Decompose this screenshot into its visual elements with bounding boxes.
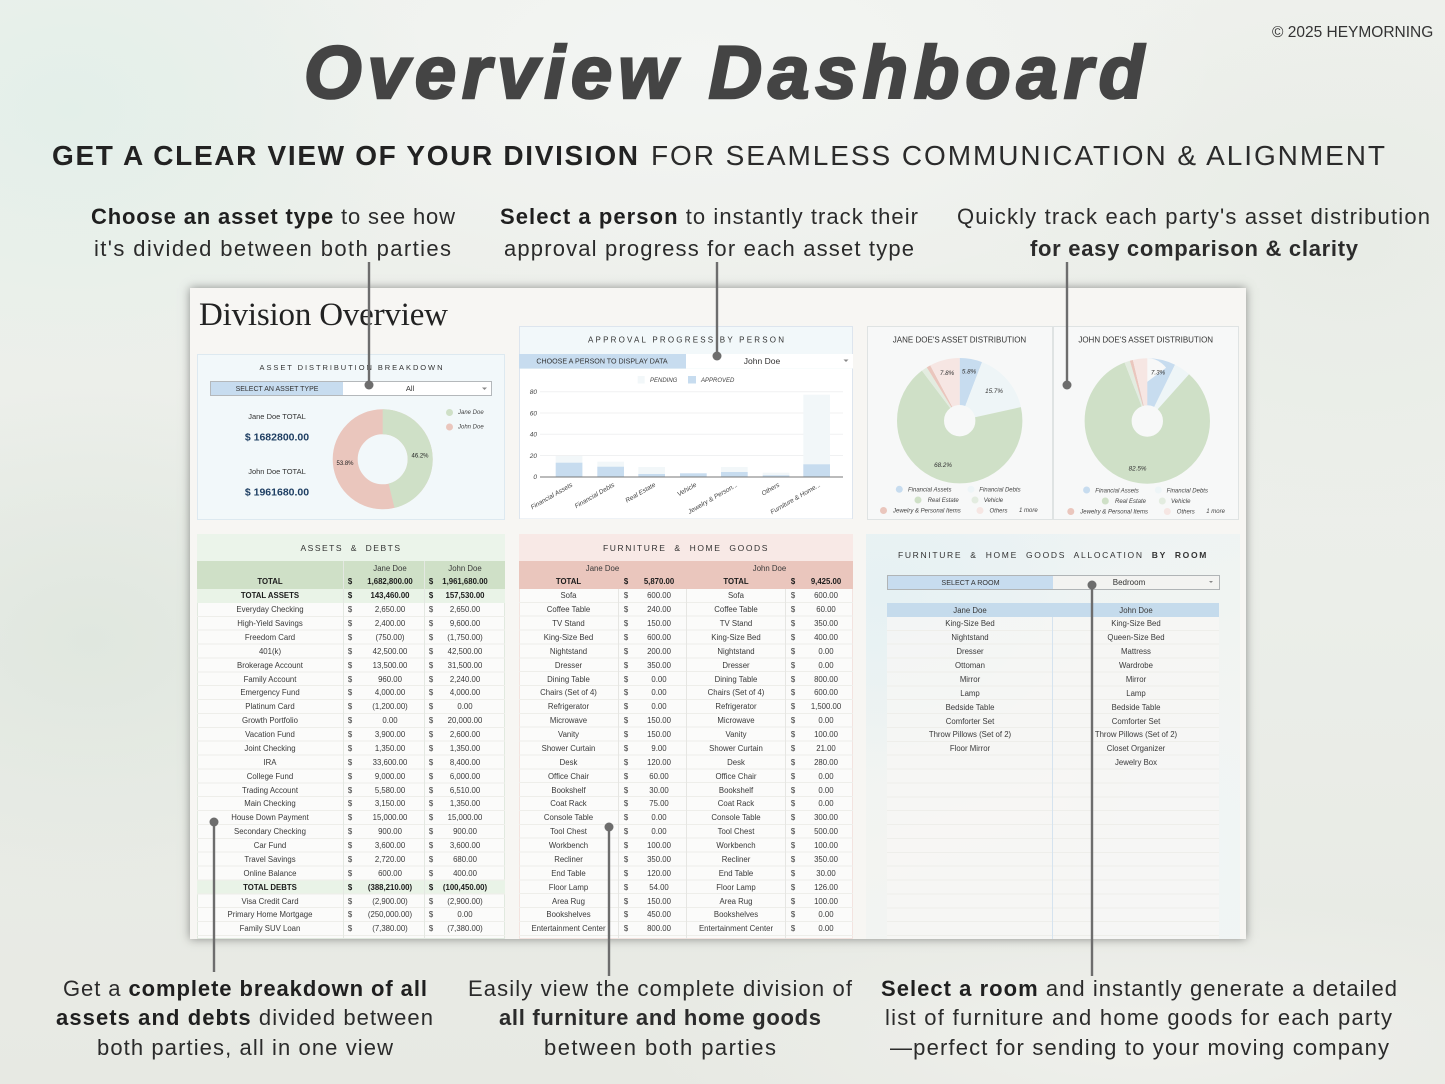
donut legend: Jane Doe (457, 410, 484, 416)
room table: jane items: Jane Doe King-Size Bed Nightstand Dresser Ottoman Mirror Lamp Bedside Table Comforter Set Throw Pillows (Set of 2) Floor Mirror (929, 606, 1011, 753)
furniture table: jane item names: TOTAL Sofa Coffee Table TV Stand King-Size Bed Nightstand Dresser Dining Table Chairs (Set of 4) Refrigerator Microwave Vanity Shower Curtain Desk Office Chair Bookshelf Coat Rack Console Table Tool Chest Workbench Recliner End Table Floor Lamp Area Rug Bookshelves Entertainment Center (531, 577, 606, 933)
caption: furniture division (468, 976, 853, 1060)
stacked bar chart: 40 (530, 432, 537, 438)
pie labels: 68.2% (934, 462, 952, 469)
panel: jane doe's asset distribution (867, 326, 1053, 520)
callout connector: furniture (604, 822, 614, 976)
assets table: john currency signs: $ $ $ $ $ $ $ $ $ $ $ $ $ $ $ $ $ $ $ $ $ $ $ $ $ $ (429, 577, 433, 933)
caption: track each party: Quickly track each party's asset distribution (957, 204, 1430, 229)
donut legend: John Doe (457, 424, 484, 430)
pie chart (1108, 382, 1186, 460)
pie labels: 7.8% (940, 370, 955, 377)
room table header (887, 603, 1219, 617)
callout connector: room (1088, 580, 1096, 976)
panel: asset distribution breakdown (197, 354, 505, 520)
caption: choose an asset type: it's divided between both parties (94, 236, 451, 261)
pie legend: 1 more (1206, 509, 1226, 515)
john doe total: $ 1961680.00 (245, 486, 309, 498)
caption: choose an asset type (91, 204, 455, 261)
stacked bar chart: Financial Assets (530, 481, 575, 511)
chart title: JOHN DOE'S ASSET DISTRIBUTION (1078, 336, 1213, 344)
donut chart: 46.2% (411, 454, 429, 460)
pie legend: Real Estate (928, 498, 959, 504)
caption: select a room: list of furniture and home goods for each party (885, 1005, 1392, 1030)
asset type selector: All (406, 384, 414, 393)
asset type selector (210, 382, 492, 396)
assets table: item names: TOTAL TOTAL ASSETS Everyday Checking High-Yield Savings Freedom Card 401(k) Brokerage Account Family Account Emergency Fund Platinum Card Growth Portfolio Vacation Fund Joint Checking IRA College Fund Trading Account Main Checking House Down Payment Secondary Checking Car Fund Travel Savings Online Balance TOTAL DEBTS Visa Credit Card Primary Home Mortgage Family SUV Loan (228, 577, 312, 933)
table column header band (197, 561, 505, 589)
pie labels: 15.7% (985, 388, 1003, 395)
dashboard heading: Division Overview (199, 297, 448, 333)
jane doe total (245, 412, 309, 444)
furniture table: jane amounts: 5,870.00 600.00 240.00 150.00 600.00 200.00 350.00 0.00 0.00 0.00 150.00 150.00 9.00 120.00 60.00 30.00 75.00 0.00 0.00 100.00 350.00 120.00 54.00 150.00 450.00 800.00 (644, 577, 674, 933)
caption: select a person: Select a person to instantly track their (500, 204, 918, 229)
stacked bar chart: 80 (530, 389, 537, 396)
dashboard sheet (190, 288, 1246, 939)
donut chart (336, 422, 429, 497)
caption: select a person (500, 204, 918, 261)
copyright notice: © 2025 HEYMORNING (1272, 24, 1433, 41)
chart legend: PENDING (650, 378, 678, 384)
pie labels (934, 368, 1003, 469)
caption: complete breakdown (56, 976, 433, 1060)
panel: approval progress by person (519, 326, 853, 519)
total assets row band (197, 589, 505, 603)
furniture table: jane currency signs: $ $ $ $ $ $ $ $ $ $ $ $ $ $ $ $ $ $ $ $ $ $ $ $ $ $ (624, 577, 628, 933)
panel: allocation by room (866, 534, 1240, 939)
pie legend: Vehicle (1171, 499, 1191, 505)
total debts row band (197, 880, 505, 894)
pie legend (1067, 486, 1226, 516)
table heading band (519, 534, 853, 561)
panel heading: APPROVAL PROGRESS BY PERSON (588, 336, 784, 344)
pie labels: 82.5% (1129, 466, 1147, 472)
chart title: JANE DOE'S ASSET DISTRIBUTION (893, 336, 1026, 344)
panel: john doe's asset distribution (1053, 326, 1239, 520)
furniture table: john amounts: 9,425.00 600.00 60.00 350.00 400.00 0.00 0.00 800.00 600.00 1,500.00 0.00 100.00 21.00 280.00 0.00 0.00 0.00 300.00 500.00 100.00 350.00 30.00 126.00 100.00 0.00 0.00 (811, 577, 841, 933)
assets table: john amounts: John Doe 1,961,680.00 157,530.00 2,650.00 9,600.00 (1,750.00) 42,500.00 31,500.00 2,240.00 4,000.00 0.00 20,000.00 2,600.00 1,350.00 8,400.00 6,000.00 6,510.00 1,350.00 15,000.00 900.00 3,600.00 680.00 400.00 (100,450.00) (2,900.00) 0.00 (7,380.00) (442, 564, 488, 933)
stacked bar chart: Real Estate (624, 481, 657, 505)
assets table: jane amounts: Jane Doe 1,682,800.00 143,460.00 2,650.00 2,400.00 (750.00) 42,500.00 13,500.00 960.00 4,000.00 (1,200.00) 0.00 3,900.00 1,350.00 33,600.00 9,000.00 5,580.00 3,150.00 15,000.00 900.00 3,600.00 2,720.00 600.00 (388,210.00) (2,900.00) (250,000.00) (7,380.00) (367, 564, 413, 933)
room selector: SELECT A ROOM (941, 578, 1000, 587)
pie labels (1129, 370, 1166, 472)
stacked bar chart (520, 369, 852, 518)
table heading band (197, 534, 505, 561)
caption: choose an asset type: Choose an asset type to see how (91, 204, 455, 229)
room selector: Bedroom (1113, 578, 1145, 587)
person selector: CHOOSE A PERSON TO DISPLAY DATA (536, 358, 668, 366)
john doe total (245, 467, 309, 498)
pie legend: Jewelry & Personal Items (1079, 510, 1148, 516)
stacked bar chart: Vehicle (676, 481, 698, 498)
caption: complete breakdown: assets and debts divided between (56, 1005, 433, 1030)
caption: complete breakdown: Get a complete breakdown of all (63, 976, 427, 1001)
pie legend: Real Estate (1115, 499, 1147, 505)
person selector (519, 354, 853, 368)
furniture table: john column label: John Doe (753, 564, 786, 572)
john doe total: John Doe TOTAL (248, 467, 306, 476)
room table: john items: John Doe King-Size Bed Queen-Size Bed Mattress Wardrobe Mirror Lamp Bedside Table Comforter Set Throw Pillows (Set of 2) Closet Organizer Jewelry Box (1095, 606, 1177, 767)
callout connector: assets and debts (210, 818, 218, 972)
assets table: jane currency signs: $ $ $ $ $ $ $ $ $ $ $ $ $ $ $ $ $ $ $ $ $ $ $ $ $ $ (348, 577, 352, 933)
pie legend: Others (1177, 510, 1195, 516)
caption: track each party: for easy comparison & clarity (1030, 236, 1359, 261)
chart legend: APPROVED (700, 378, 735, 384)
chart legend (638, 376, 735, 384)
asset type selector: SELECT AN ASSET TYPE (236, 386, 319, 393)
stacked bar chart: 20 (529, 453, 537, 460)
column separators (618, 589, 619, 939)
row grid lines (197, 603, 505, 939)
caption: furniture division: between both parties (544, 1035, 776, 1060)
pie legend: 1 more (1019, 508, 1038, 514)
donut legend (446, 409, 484, 430)
caption: furniture division: all furniture and home goods (499, 1005, 821, 1030)
panel heading: FURNITURE & HOME GOODS ALLOCATION BY ROOM (898, 550, 1208, 560)
room selector (887, 575, 1220, 590)
pie legend: Vehicle (984, 498, 1004, 504)
room table rows (887, 617, 1219, 939)
subtitle: FOR SEAMLESS COMMUNICATION & ALIGNMENT (651, 140, 1385, 171)
subtitle (52, 140, 1385, 171)
caption: select a room: —perfect for sending to your moving company (890, 1035, 1389, 1060)
row grid lines (519, 589, 853, 939)
caption: track each party (957, 204, 1430, 261)
pie legend (880, 486, 1038, 514)
callout connector: asset type (364, 262, 374, 390)
furniture table: jane column label: Jane Doe (586, 564, 619, 572)
table heading band: FURNITURE & HOME GOODS (603, 543, 769, 553)
panel: assets and debts table (197, 534, 505, 939)
pie legend: Others (990, 508, 1008, 514)
column separators (343, 561, 344, 939)
donut chart: 53.8% (336, 461, 354, 467)
caption: complete breakdown: both parties, all in one view (97, 1035, 393, 1060)
jane doe total: Jane Doe TOTAL (248, 412, 306, 421)
callout connector: asset distribution (1062, 262, 1072, 390)
person selector: John Doe (744, 356, 780, 366)
stacked bar chart: Furniture & Home... (769, 482, 822, 516)
stacked bar chart: Jewelry & Person... (686, 482, 739, 516)
furniture table: john currency signs: $ $ $ $ $ $ $ $ $ $ $ $ $ $ $ $ $ $ $ $ $ $ $ $ $ $ (791, 577, 795, 933)
caption: select a room: Select a room and instantly generate a detailed (881, 976, 1397, 1001)
caption: select a person: approval progress for each asset type (504, 236, 914, 261)
title: Overview Dashboard (304, 31, 1146, 114)
pie labels: 7.3% (1151, 370, 1166, 376)
furniture table: john item names: TOTAL Sofa Coffee Table TV Stand King-Size Bed Nightstand Dresser Dining Table Chairs (Set of 4) Refrigerator Microwave Vanity Shower Curtain Desk Office Chair Bookshelf Coat Rack Console Table Tool Chest Workbench Recliner End Table Floor Lamp Area Rug Bookshelves Entertainment Center (699, 577, 773, 933)
table heading band: ASSETS & DEBTS (300, 543, 402, 553)
pie legend: Financial Assets (908, 488, 951, 494)
pie legend: Financial Assets (1095, 488, 1139, 494)
stacked bar chart: 60 (530, 410, 537, 418)
jane doe total: $ 1682800.00 (245, 432, 309, 444)
callout connector: person (712, 262, 722, 360)
room table center divider (1052, 617, 1053, 939)
stacked bar chart: 0 (533, 474, 537, 481)
pie legend: Financial Debts (1167, 488, 1208, 494)
stacked bar chart: Others (761, 481, 782, 497)
pie labels: 5.8% (962, 368, 977, 376)
pie chart (920, 382, 999, 460)
stacked bar chart: Financial Debts (574, 481, 617, 510)
caption: select a room (881, 976, 1397, 1060)
subtitle: GET A CLEAR VIEW OF YOUR DIVISION (52, 140, 638, 171)
pie legend: Financial Debts (979, 488, 1021, 494)
caption: furniture division: Easily view the complete division of (468, 976, 853, 1001)
panel heading: ASSET DISTRIBUTION BREAKDOWN (260, 363, 442, 372)
panel: furniture and home goods table (519, 534, 853, 939)
pie legend: Jewelry & Personal Items (892, 508, 961, 514)
table column header band (519, 561, 853, 589)
